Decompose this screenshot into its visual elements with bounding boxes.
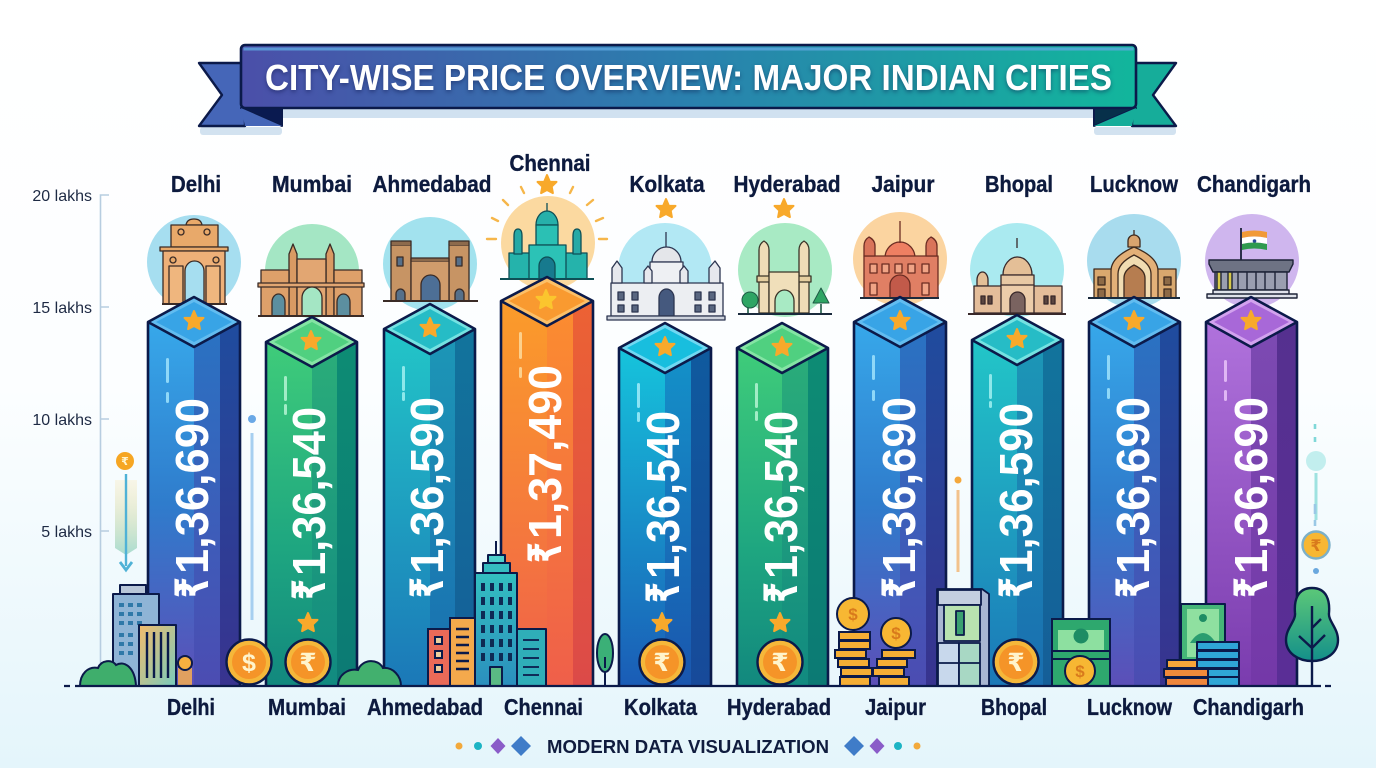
icon: Hyderabad Charminar [738, 199, 832, 317]
bar: Mumbai [266, 317, 357, 686]
top city labels [171, 150, 1311, 197]
label Kolkata: Kolkata [630, 171, 705, 197]
bar: Delhi [148, 297, 240, 686]
icon: rupee coin and star on Hyderabad: ₹ [771, 649, 789, 677]
label Hyderabad: Hyderabad [727, 694, 831, 720]
cap Mumbai [266, 317, 357, 367]
icon: dollar coin near Delhi [226, 640, 272, 684]
label Jaipur: Jaipur [865, 694, 926, 720]
icon: Jaipur palace [853, 212, 947, 306]
label Chennai: Chennai [510, 150, 590, 176]
baseline [64, 685, 1331, 687]
icon: rupee coin with down arrow, left: ₹ [121, 456, 129, 468]
footer ornaments left [456, 736, 531, 756]
icon: cash and coloured stacks near Chandigarh [1164, 604, 1239, 686]
cap Kolkata [619, 323, 711, 373]
cap Jaipur [854, 297, 946, 347]
value Bhopal: ₹1,36,590 [990, 403, 1042, 598]
bar: Ahmedabad [384, 304, 475, 686]
icon: left city buildings [113, 585, 192, 686]
bar: Hyderabad [737, 323, 828, 686]
icon: rupee coin and star on Hyderabad [758, 613, 802, 684]
value Ahmedabad: ₹1,36,590 [401, 397, 453, 598]
icon: rupee coin on Bhopal [994, 640, 1038, 684]
cap Hyderabad [737, 323, 828, 373]
title: CITY-WISE PRICE OVERVIEW: MAJOR INDIAN CITIES [265, 57, 1112, 98]
bar: Lucknow [1089, 297, 1180, 686]
icon: rupee coin and star on Mumbai: ₹ [299, 649, 317, 677]
label Kolkata: Kolkata [624, 694, 697, 720]
sun rays [487, 187, 607, 239]
footer caption: MODERN DATA VISUALIZATION [547, 736, 829, 757]
label Mumbai: Mumbai [268, 694, 346, 720]
label Lucknow: Lucknow [1087, 694, 1172, 720]
icon: Chennai temple with sun rays [487, 175, 607, 290]
axis label 10 lakhs: 10 lakhs [32, 412, 92, 429]
footer [456, 736, 920, 757]
icon: ATM machine [937, 589, 989, 686]
label Delhi: Delhi [167, 694, 215, 720]
icon: rupee coin and star on Kolkata [640, 613, 684, 684]
value Chandigarh: ₹1,36,690 [1225, 397, 1277, 598]
icon: left bush [80, 661, 136, 686]
icon: Mumbai Gateway of India [258, 224, 364, 318]
footer ornaments right [844, 736, 920, 756]
icon: small tree [597, 634, 613, 686]
icon: Chandigarh assembly and flag [1205, 214, 1299, 308]
icon: Bhopal mosque [968, 223, 1066, 317]
label Ahmedabad: Ahmedabad [372, 171, 492, 197]
icon: Ahmedabad bush [338, 661, 401, 686]
icon: rupee coin and star on Mumbai [286, 613, 330, 684]
cap Delhi [148, 297, 240, 347]
icon: coin stacks on Jaipur [835, 598, 915, 686]
bar: Bhopal [972, 315, 1063, 686]
cap Bhopal [972, 315, 1063, 365]
bar: Jaipur [854, 297, 946, 686]
cap Chandigarh [1206, 297, 1297, 347]
icon: coin stacks on Jaipur: $ [891, 624, 901, 643]
star above Kolkata [656, 199, 676, 217]
icon: right coin with dotted line: ₹ [1310, 538, 1322, 555]
label Ahmedabad: Ahmedabad [367, 694, 483, 720]
axis label 15 lakhs: 15 lakhs [32, 300, 92, 317]
label Delhi: Delhi [171, 171, 221, 197]
cap Lucknow [1089, 297, 1180, 347]
value Chennai: ₹1,37,490 [519, 365, 571, 563]
icon: rupee coin on Bhopal: ₹ [1007, 649, 1025, 677]
label Bhopal: Bhopal [981, 694, 1047, 720]
icon: rupee coin and star on Kolkata: ₹ [653, 649, 671, 677]
decorative orange dot and line near Bhopal [954, 476, 962, 572]
icon: right tree [1286, 588, 1338, 686]
label Jaipur: Jaipur [872, 171, 935, 197]
decorative dot and line near Mumbai [248, 415, 256, 620]
label Bhopal: Bhopal [985, 171, 1053, 197]
star above Hyderabad [774, 199, 794, 217]
axis label 5 lakhs: 5 lakhs [41, 524, 92, 541]
bar: Chennai (highest) [501, 277, 593, 686]
icon: Lucknow Imambara [1087, 214, 1181, 308]
icon: dollar coin near Delhi: $ [242, 649, 256, 677]
bar: Chandigarh [1206, 297, 1297, 686]
bar: Kolkata [619, 323, 711, 686]
axis label 20 lakhs: 20 lakhs [32, 188, 92, 205]
icon: Ahmedabad buildings [428, 618, 475, 686]
value Jaipur: ₹1,36,690 [873, 397, 925, 598]
icon: cash bundle with coin [1052, 619, 1110, 686]
cap Chennai [501, 277, 593, 326]
value Lucknow: ₹1,36,690 [1107, 397, 1159, 598]
value Mumbai: ₹1,36,540 [283, 407, 335, 600]
banner ribbon tails [199, 63, 1176, 135]
label Chandigarh: Chandigarh [1193, 694, 1304, 720]
icon: cash bundle with coin: $ [1075, 662, 1085, 681]
label Hyderabad: Hyderabad [734, 171, 840, 197]
star above Chennai [538, 175, 556, 193]
cap Ahmedabad [384, 304, 475, 354]
icon: rupee coin with down arrow, left [115, 452, 137, 570]
banner main plate [241, 45, 1136, 108]
icon: coin stacks on Jaipur: $ [848, 605, 858, 624]
icon: Delhi India Gate [147, 215, 241, 309]
label Mumbai: Mumbai [272, 171, 352, 197]
title banner [199, 45, 1176, 135]
value Hyderabad: ₹1,36,540 [755, 411, 807, 603]
icon: teal skyscraper by Chennai [475, 541, 546, 686]
label Chennai: Chennai [504, 694, 583, 720]
bottom city labels [167, 694, 1304, 720]
icon: right coin with dotted line [1302, 424, 1330, 574]
y axis [32, 188, 109, 667]
icon: Ahmedabad fort gate [383, 217, 478, 311]
label Chandigarh: Chandigarh [1197, 171, 1311, 197]
label Lucknow: Lucknow [1090, 171, 1178, 197]
value Delhi: ₹1,36,690 [166, 398, 218, 598]
Indian flag [1242, 230, 1267, 250]
icon: Kolkata Victoria Memorial [607, 199, 725, 320]
value Kolkata: ₹1,36,540 [637, 411, 689, 603]
